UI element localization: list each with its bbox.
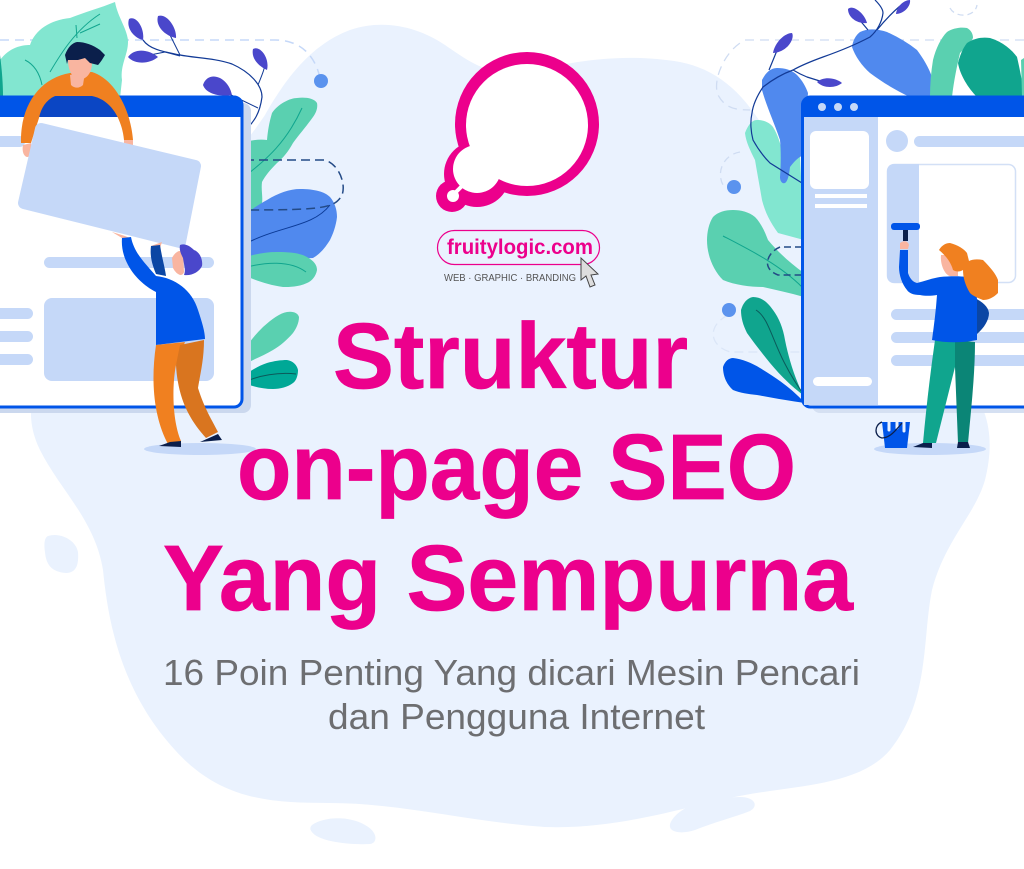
teal lower leaf bbox=[741, 297, 803, 395]
window frame bbox=[802, 97, 1024, 407]
navy dashed capsule bbox=[767, 247, 802, 275]
window header bbox=[0, 96, 243, 117]
bucket bbox=[876, 422, 910, 448]
left browser window bbox=[0, 96, 251, 413]
dot left bbox=[314, 74, 328, 88]
subtitle: 16 Poin Penting Yang dicari Mesin Pencari bbox=[163, 652, 860, 693]
logo wordmark pill: fruitylogic.com bbox=[447, 236, 593, 259]
mint leaf behind window bbox=[0, 2, 128, 98]
right plants bbox=[707, 0, 1024, 403]
title: Struktur bbox=[333, 304, 688, 408]
logo tagline: WEB · GRAPHIC · BRANDING bbox=[444, 272, 576, 284]
small blob left bbox=[44, 535, 78, 573]
green leaf middle bbox=[243, 252, 317, 287]
blue leaf bbox=[243, 189, 337, 262]
hair bbox=[939, 243, 998, 300]
purple sprig bbox=[128, 16, 268, 132]
logo bubble icon bbox=[436, 52, 599, 212]
window shadow bbox=[812, 110, 1024, 413]
green top leaves bbox=[930, 28, 973, 97]
header dots bbox=[818, 103, 858, 111]
leaf veins bbox=[25, 14, 100, 85]
subtitle bbox=[163, 652, 860, 737]
man with blue shirt bbox=[112, 232, 256, 455]
green left round leaf bbox=[707, 210, 804, 297]
tilted card carried bbox=[24, 129, 195, 242]
dashed loop left bbox=[242, 160, 343, 210]
small blob bottom bbox=[310, 818, 375, 844]
arm back bbox=[975, 298, 989, 334]
navy sprig bbox=[751, 0, 900, 183]
bars bbox=[0, 136, 214, 381]
title: on-page SEO bbox=[237, 415, 796, 519]
right browser window bbox=[801, 96, 1024, 413]
logo wordmark pill bbox=[438, 230, 600, 264]
blue lower leaf bbox=[723, 358, 805, 403]
paint roller bbox=[891, 223, 920, 241]
green leaf lower bbox=[243, 312, 299, 365]
title bbox=[163, 304, 854, 630]
green leaf upper bbox=[243, 98, 317, 217]
blue left leaf bbox=[762, 68, 808, 183]
subtitle: dan Pengguna Internet bbox=[328, 696, 705, 737]
decorative dashed connector left bbox=[0, 40, 320, 78]
content placeholders bbox=[886, 130, 908, 152]
sidebar bbox=[804, 117, 878, 405]
woman painting bbox=[874, 223, 998, 455]
icon: cursor bbox=[581, 258, 598, 287]
dashed loops right bbox=[717, 40, 1024, 110]
man with orange shirt bbox=[21, 42, 133, 157]
small blob bottom right bbox=[670, 797, 755, 832]
left plants bbox=[0, 2, 337, 389]
teal leaf bbox=[243, 360, 298, 389]
mint tall leaf bbox=[745, 120, 804, 240]
title: Yang Sempurna bbox=[163, 526, 854, 630]
sidebar card bbox=[810, 131, 872, 386]
trousers bbox=[923, 340, 955, 443]
blue top leaf bbox=[852, 29, 932, 97]
window shadow bbox=[0, 103, 251, 413]
shirt bbox=[899, 250, 977, 342]
window header bbox=[801, 96, 1024, 117]
dots right bbox=[727, 180, 741, 194]
window frame bbox=[0, 97, 242, 407]
